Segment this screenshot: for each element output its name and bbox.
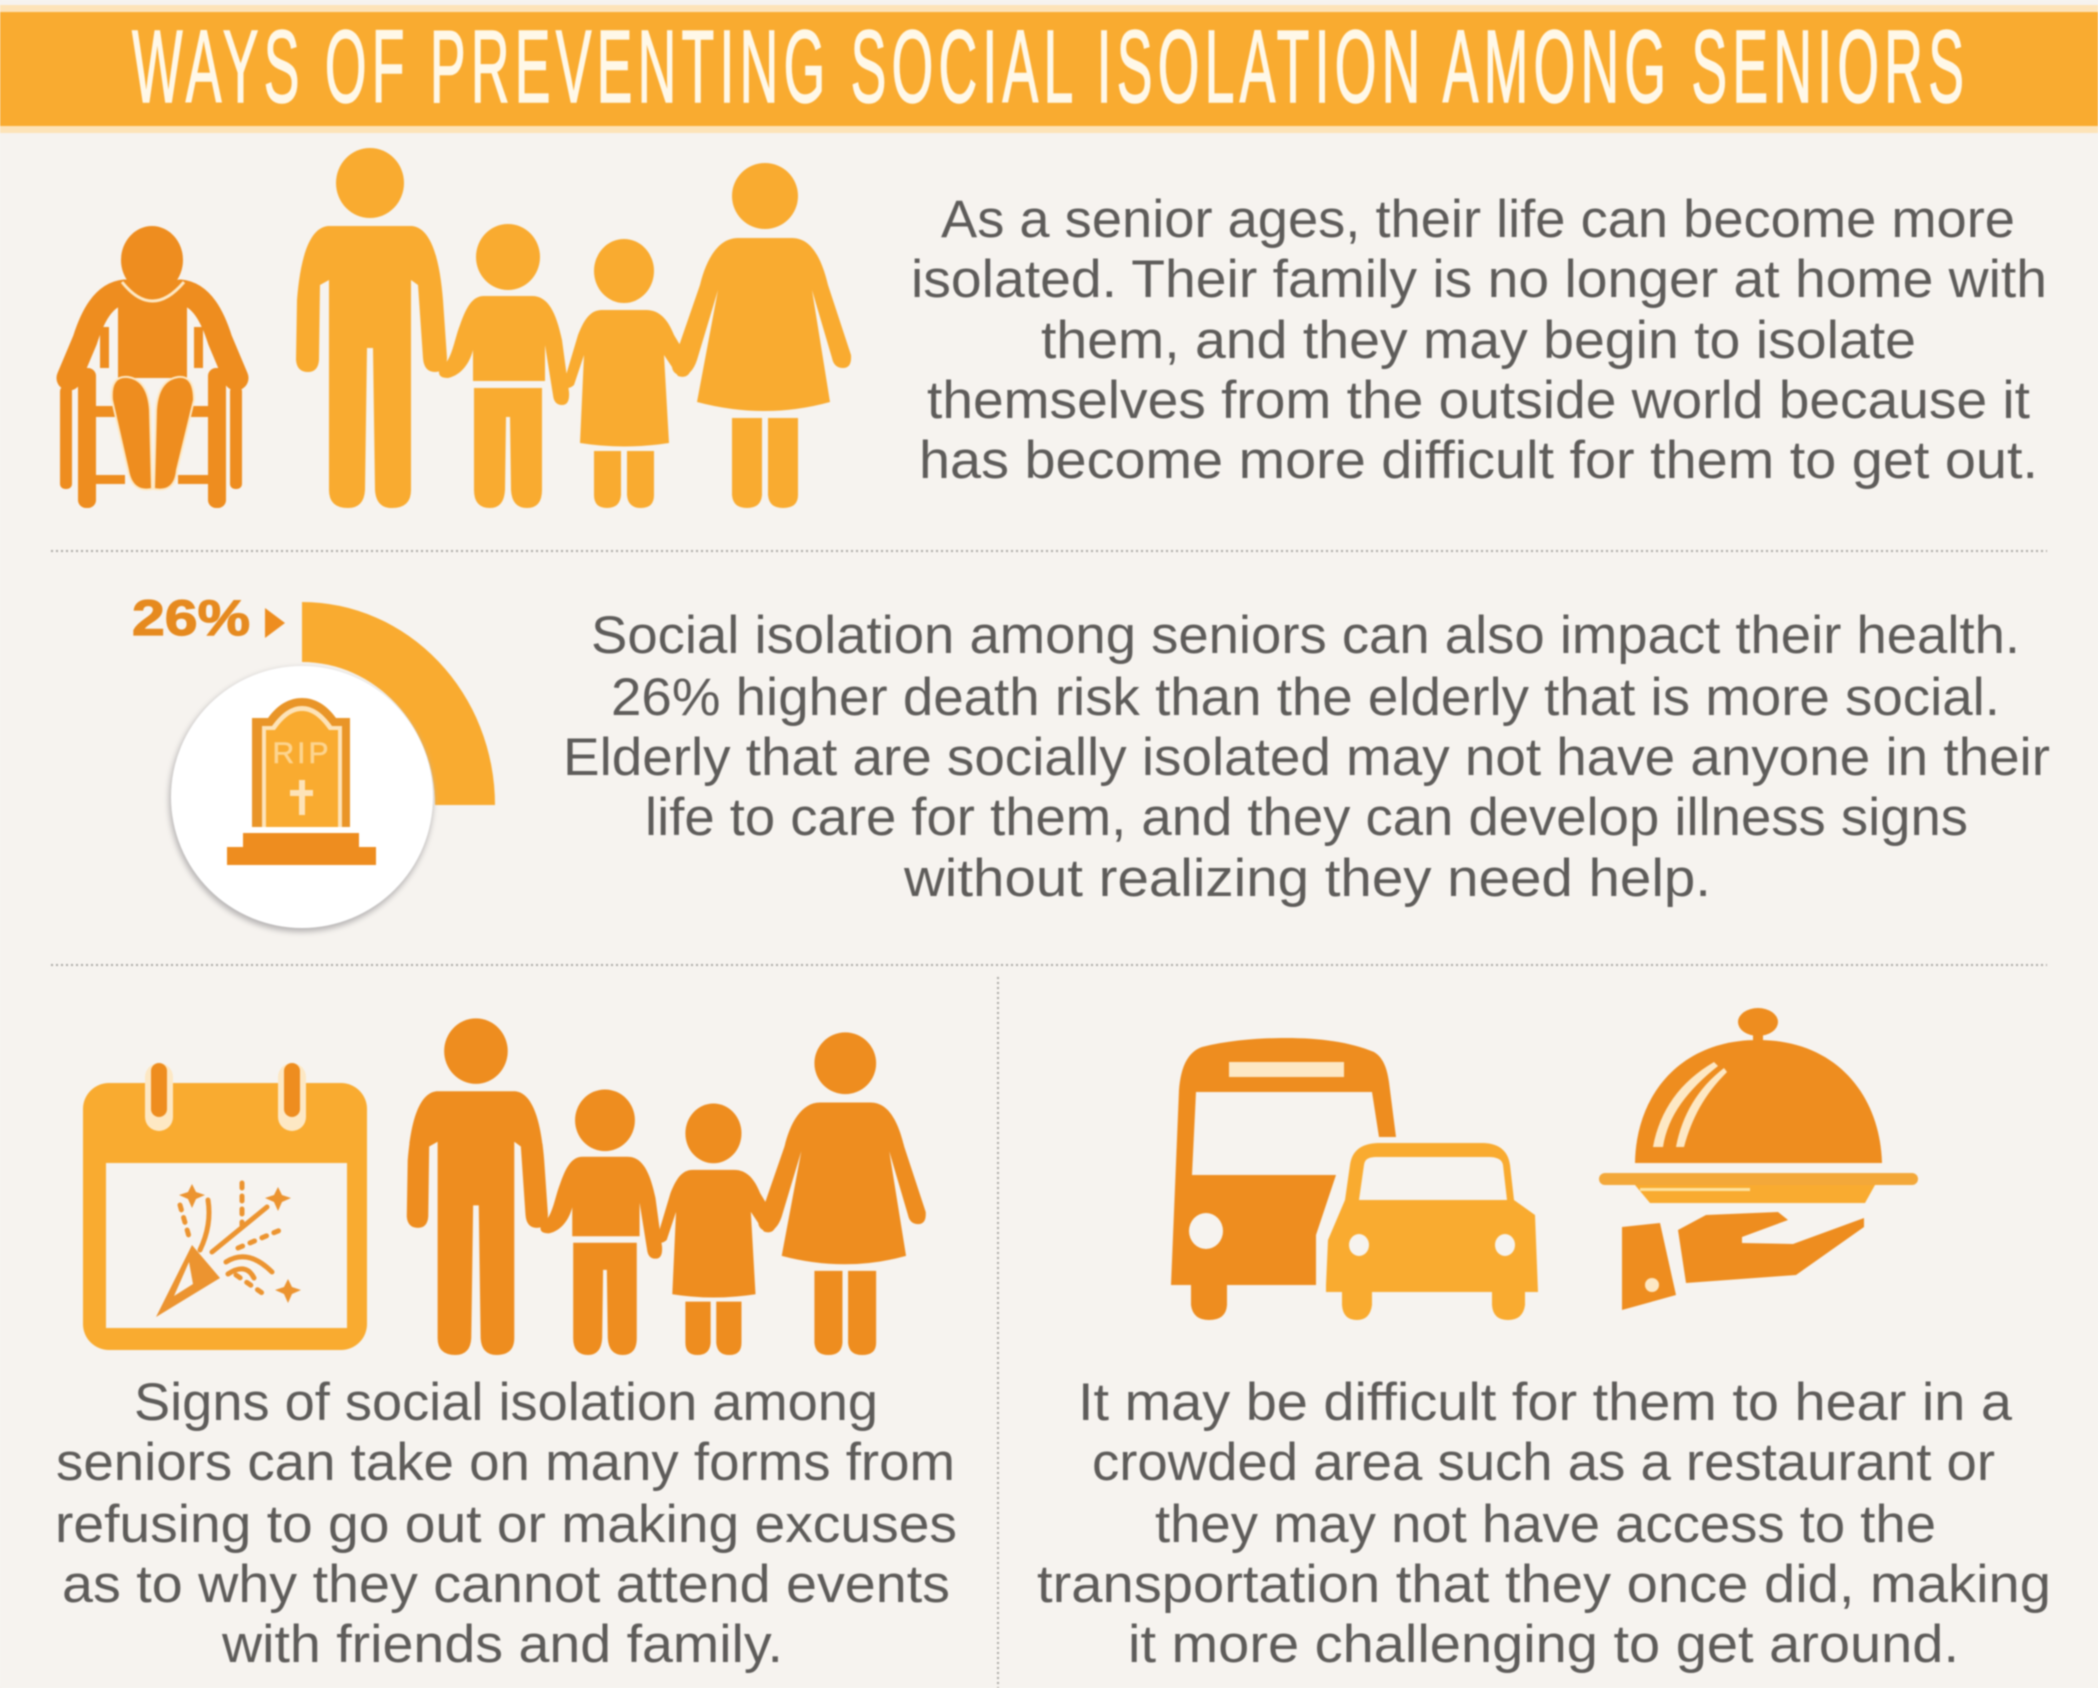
text block: access difficulties: [1037, 1373, 2051, 1674]
text block: health impact: without realizing they need help.: [903, 849, 1711, 908]
text block: signs of isolation: seniors can take on many forms from: [56, 1433, 955, 1492]
icon: gravestone: RIP: [272, 737, 332, 770]
text block: intro: has become more difficult for them to get out.: [919, 431, 2038, 490]
text block: intro: themselves from the outside world because it: [927, 371, 2030, 430]
chart: 26% quarter-arc with gravestone: [132, 590, 495, 932]
icon: family, light: [296, 148, 851, 508]
title banner: [0, 5, 2098, 133]
icon: gravestone: [227, 698, 376, 865]
text block: health impact: Social isolation among seniors can also impact their health.: [591, 606, 2020, 665]
icon: car: [1326, 1143, 1538, 1320]
text block: signs of isolation: Signs of social isolation among: [134, 1373, 878, 1432]
white circle: [171, 666, 433, 928]
icon: calendar with party popper: [83, 1063, 367, 1350]
text block: access difficulties: it more challenging to get around.: [1128, 1615, 1959, 1674]
text block: access difficulties: they may not have access to the: [1155, 1495, 1936, 1554]
icon: family, dark: [407, 1018, 926, 1355]
text block: signs of isolation: as to why they cannot attend events: [62, 1555, 950, 1614]
icon: bus: [1171, 1038, 1396, 1320]
arrow: [265, 608, 285, 638]
text block: intro: [911, 190, 2047, 490]
title: WAYS OF PREVENTING SOCIAL ISOLATION AMONG SENIORS: [132, 10, 1964, 125]
icon: serving cloche and hand: [1599, 1008, 1918, 1310]
text block: health impact: [563, 606, 2050, 908]
text block: signs of isolation: [55, 1373, 957, 1674]
text block: health impact: life to care for them, and they can develop illness signs: [645, 788, 1968, 847]
26% label: 26%: [132, 590, 250, 646]
text block: intro: them, and they may begin to isolate: [1041, 311, 1916, 370]
text block: signs of isolation: refusing to go out or making excuses: [55, 1495, 957, 1554]
text block: signs of isolation: with friends and family.: [221, 1615, 783, 1674]
text block: intro: isolated. Their family is no longer at home with: [911, 250, 2047, 309]
text block: intro: As a senior ages, their life can become more: [941, 190, 2015, 249]
text block: access difficulties: crowded area such as a restaurant or: [1092, 1433, 1995, 1492]
text block: access difficulties: It may be difficult for them to hear in a: [1078, 1373, 2013, 1432]
party popper: [156, 1183, 301, 1317]
arc segment: [302, 602, 495, 805]
text block: health impact: Elderly that are socially isolated may not have anyone in their: [563, 728, 2050, 787]
text block: health impact: 26% higher death risk than the elderly that is more social.: [611, 668, 2000, 727]
text block: access difficulties: transportation that they once did, making: [1037, 1555, 2051, 1614]
icon: senior in wheelchair: [60, 226, 242, 508]
